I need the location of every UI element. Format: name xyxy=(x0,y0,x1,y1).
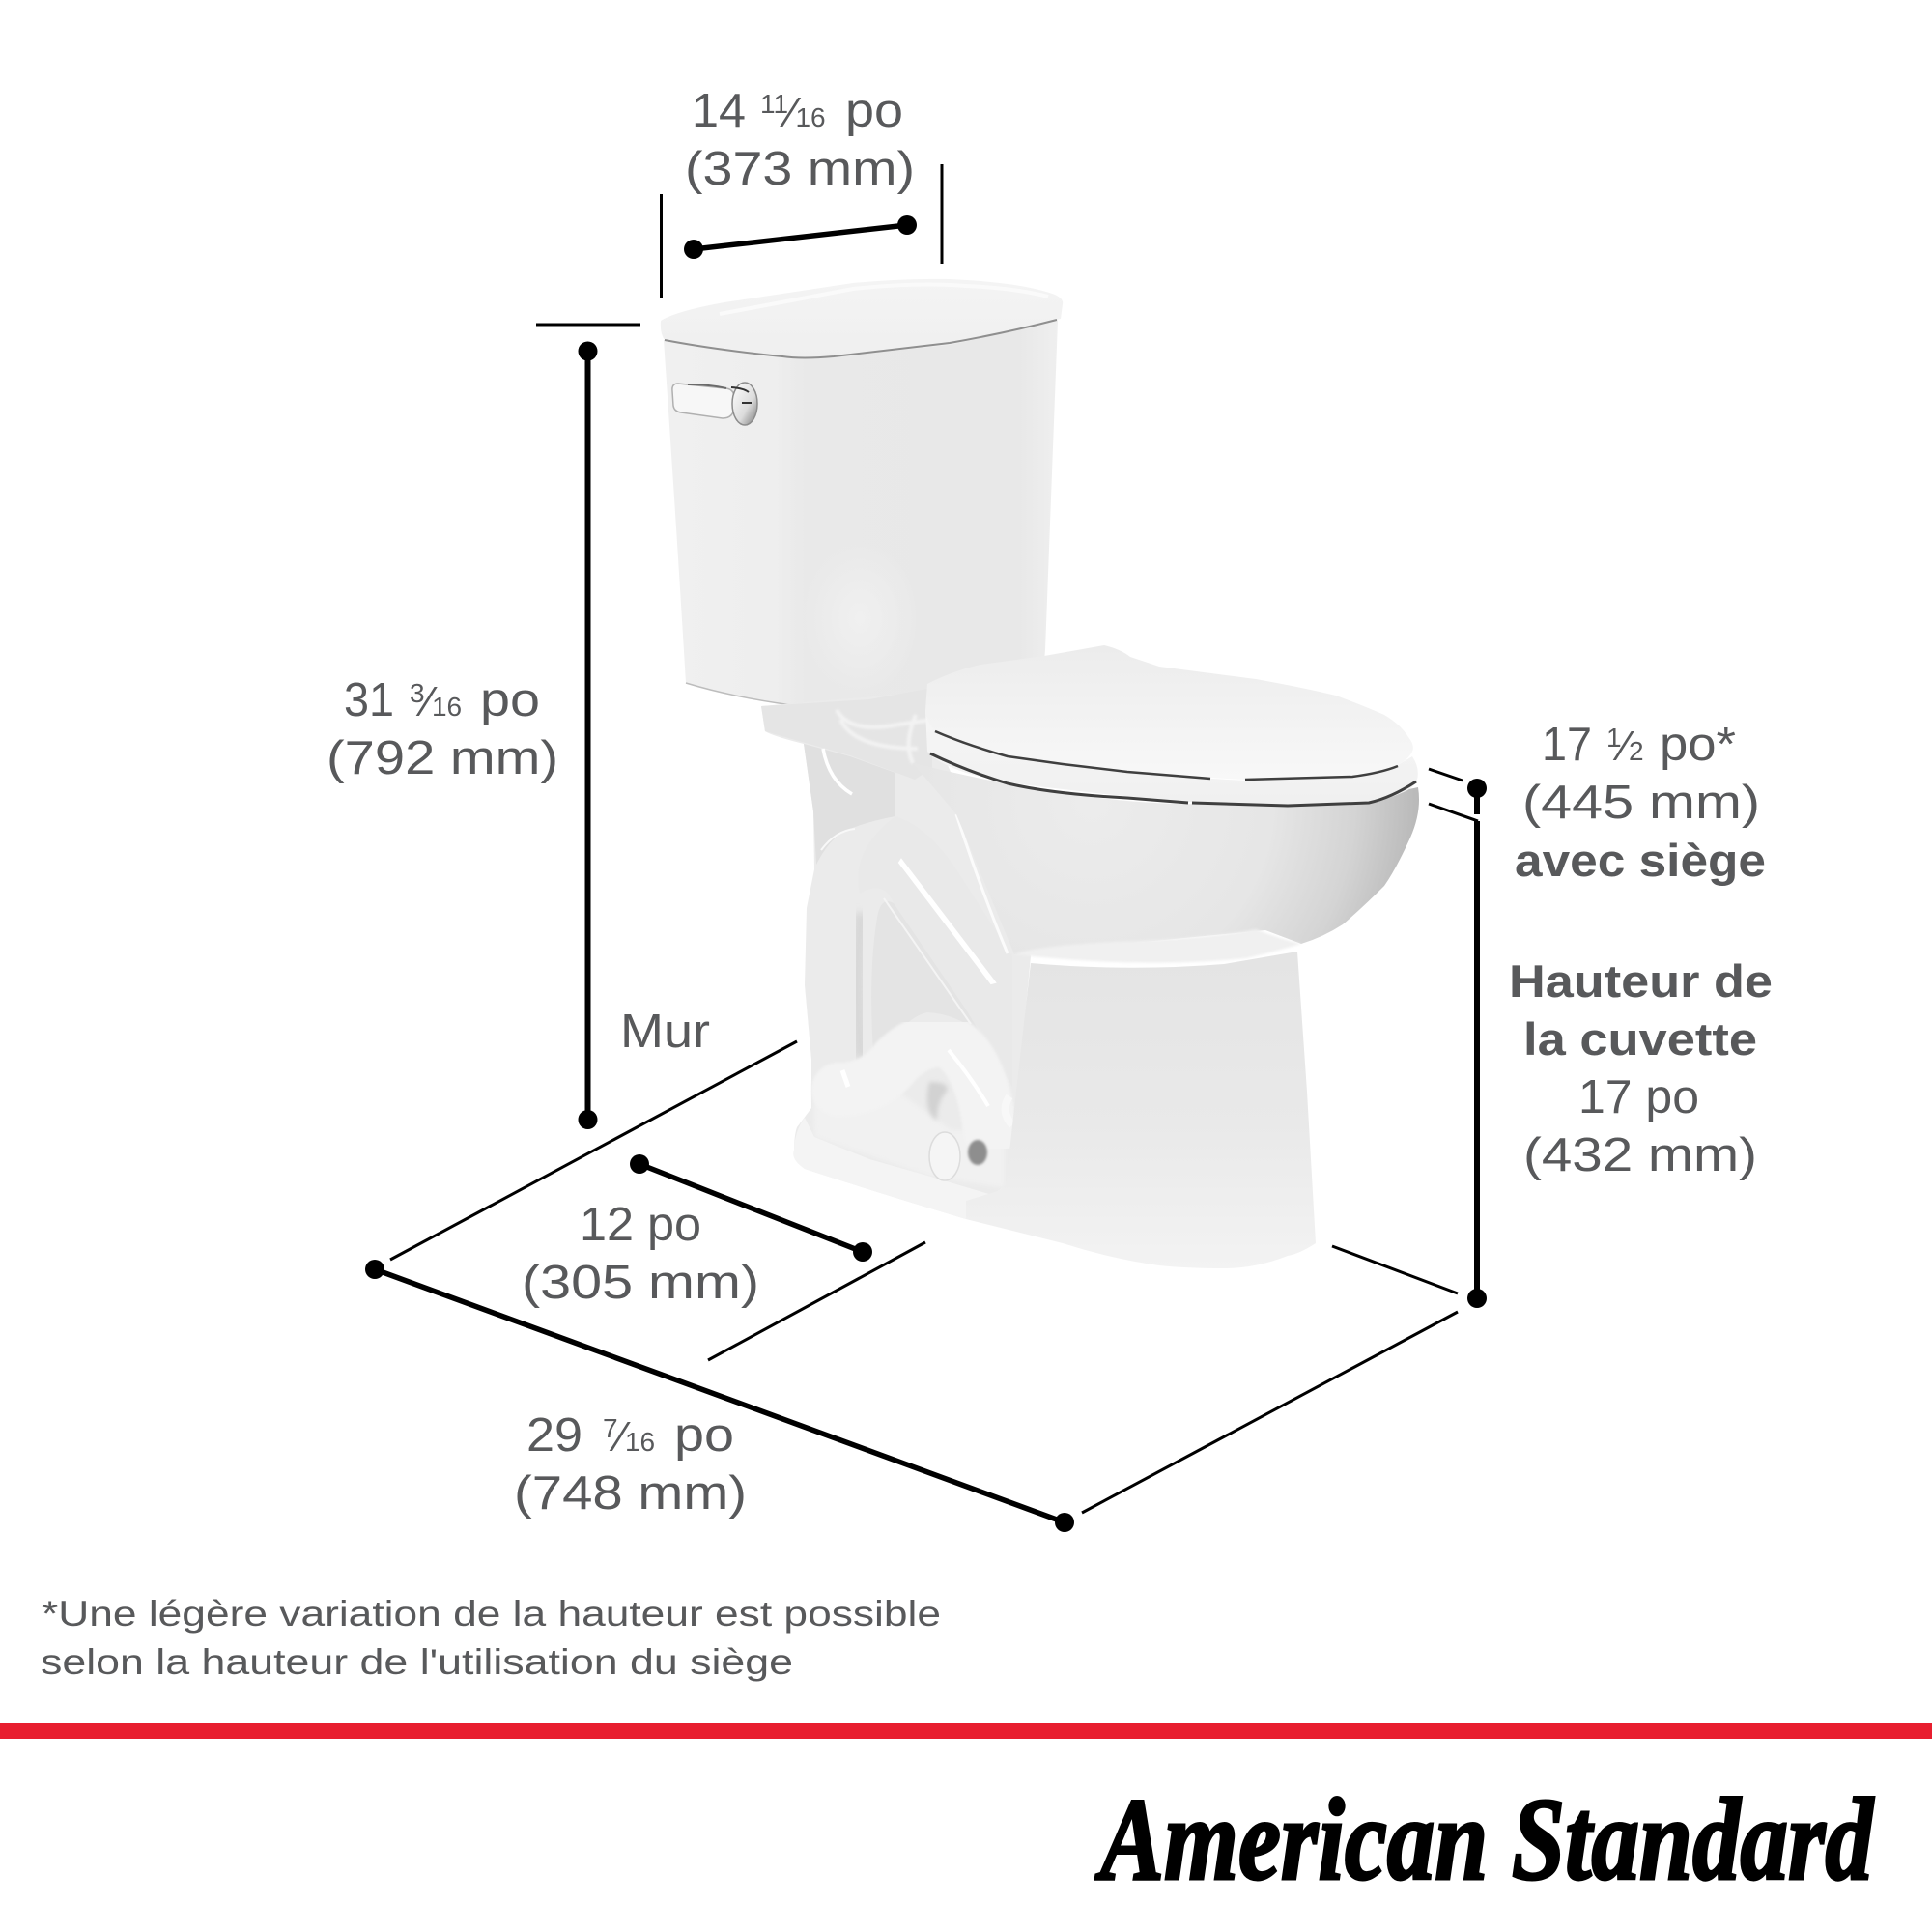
height label: 31 xyxy=(344,674,394,726)
seat height label: avec siège xyxy=(1515,835,1766,886)
flush handle xyxy=(672,383,757,425)
toilet base skirt xyxy=(966,952,1316,1268)
white glaze highlights xyxy=(899,860,995,983)
rough-in label: 12 po xyxy=(580,1199,701,1251)
top extension tick xyxy=(536,323,640,327)
recess under the arch xyxy=(871,901,998,1067)
seat height label: ⁄ xyxy=(1613,723,1635,770)
rim extension tick xyxy=(1429,804,1478,821)
bowl height label: 17 po xyxy=(1578,1071,1699,1123)
trapway side of the bowl xyxy=(761,693,1031,1219)
footnote: selon la hauteur de l'utilisation du siège xyxy=(41,1642,793,1682)
bowl height label: Hauteur de xyxy=(1509,955,1773,1007)
dimension: overall height xyxy=(327,325,640,1129)
toilet bowl xyxy=(913,763,1419,954)
depth label: ⁄ xyxy=(610,1413,632,1461)
toilet tank body xyxy=(664,321,1058,705)
neck shading xyxy=(804,744,895,865)
arch right shade xyxy=(858,816,1012,1087)
width label: 14 xyxy=(692,85,746,137)
width label: 11 xyxy=(760,89,788,119)
seat height label: 2 xyxy=(1629,736,1644,766)
dimension line xyxy=(630,1154,872,1262)
red divider bar xyxy=(0,1723,1932,1739)
depth label: 7 xyxy=(603,1413,618,1443)
footnote xyxy=(41,1594,941,1682)
height label: 16 xyxy=(432,692,462,722)
seat height label: 1 xyxy=(1606,723,1622,753)
extension tick: tank right xyxy=(941,164,943,264)
footnote: *Une légère variation de la hauteur est possible xyxy=(42,1594,941,1634)
toilet seat lid xyxy=(925,645,1416,806)
width label: ⁄ xyxy=(780,89,802,136)
bowl height label: la cuvette xyxy=(1523,1013,1757,1065)
dimension line xyxy=(578,342,597,1129)
height label: (792 mm) xyxy=(327,732,558,784)
seat height label xyxy=(1515,719,1766,886)
dimension: tank width xyxy=(661,85,942,298)
front reference line xyxy=(1082,1312,1458,1513)
foot rim xyxy=(793,1118,1005,1219)
width label xyxy=(685,85,915,195)
floor extension tick xyxy=(1332,1246,1458,1293)
rough-in label xyxy=(522,1199,759,1309)
dimension: overall depth xyxy=(365,1260,1458,1532)
bolt cap xyxy=(929,1132,960,1180)
dimension line xyxy=(365,1260,1074,1532)
rough-in reference line xyxy=(708,1242,925,1360)
rough-in label: (305 mm) xyxy=(522,1257,759,1309)
height label: ⁄ xyxy=(416,678,439,725)
width label: 16 xyxy=(795,102,826,132)
wall reference line xyxy=(390,1041,797,1260)
width label: po xyxy=(845,85,903,137)
seat height label: (445 mm) xyxy=(1522,777,1760,829)
arch column shade xyxy=(857,913,862,1058)
bowl underside ledge xyxy=(1014,929,1301,963)
depth label: (748 mm) xyxy=(514,1467,747,1520)
toilet tank lid xyxy=(661,279,1063,357)
dimension: bowl and seat height xyxy=(1332,719,1773,1308)
seat height label: 17 xyxy=(1542,719,1592,771)
bowl height label: (432 mm) xyxy=(1523,1129,1757,1181)
seat extension tick xyxy=(1429,769,1463,781)
bowl height label xyxy=(1509,955,1773,1181)
illustration: toilet xyxy=(661,279,1419,1268)
seat height label: po* xyxy=(1660,719,1736,771)
height label: po xyxy=(480,674,540,726)
lower arch xyxy=(838,1040,990,1130)
depth label: 16 xyxy=(625,1427,655,1457)
depth label: 29 xyxy=(526,1409,582,1462)
dimension: rough-in xyxy=(390,1041,925,1360)
dimension line xyxy=(684,215,917,259)
extension tick: tank left xyxy=(660,194,663,298)
floor of trap xyxy=(813,1090,1005,1188)
drain shadow xyxy=(968,1140,987,1165)
trap hole shadow xyxy=(927,1082,948,1121)
bowl height line xyxy=(1467,821,1487,1308)
seat height line xyxy=(1467,779,1487,814)
seat ring xyxy=(925,710,1418,805)
height label: 3 xyxy=(410,678,425,708)
depth label xyxy=(514,1409,747,1520)
height label xyxy=(327,674,558,784)
tank flange xyxy=(761,688,932,780)
width label: (373 mm) xyxy=(685,143,915,195)
label: wall: Mur xyxy=(620,1006,710,1058)
depth label: po xyxy=(674,1409,734,1462)
